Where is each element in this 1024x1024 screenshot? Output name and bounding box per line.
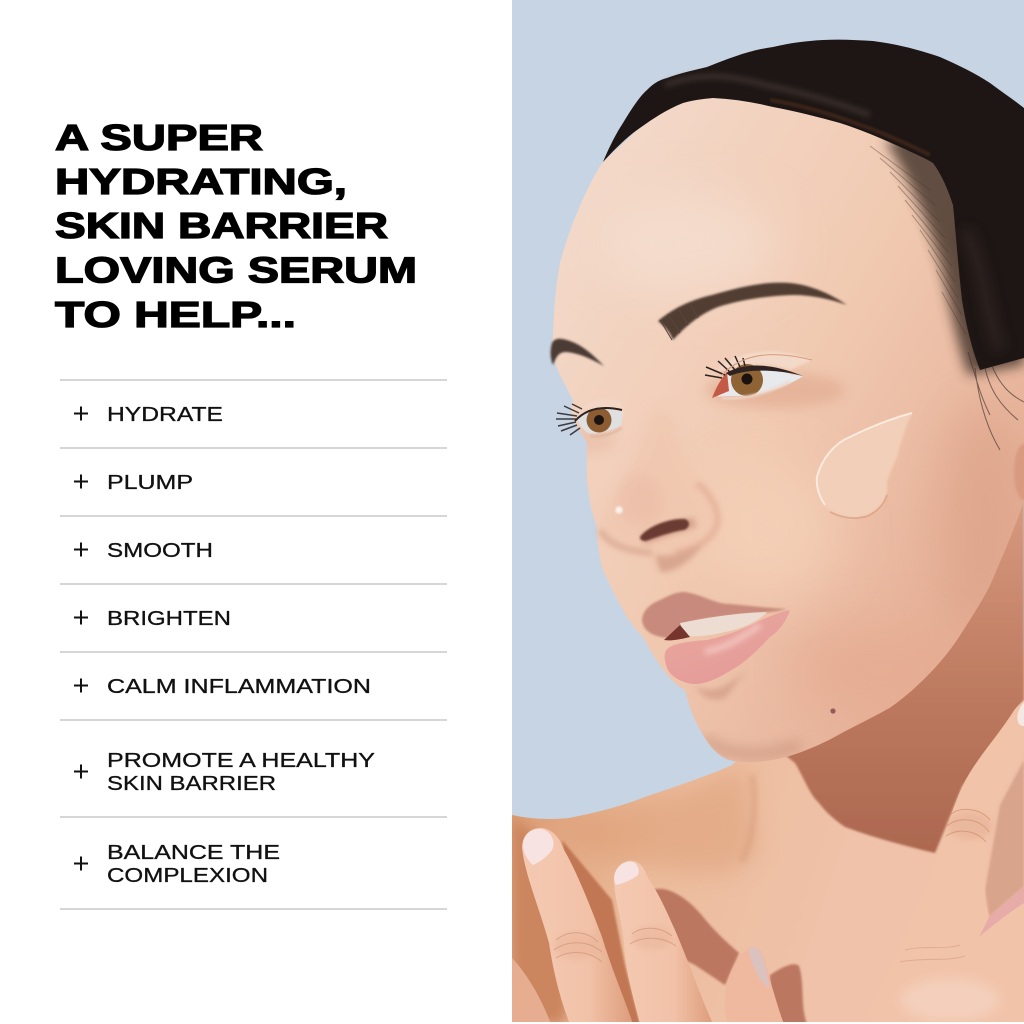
face [552,90,1024,762]
title: TO HELP... [55,294,296,335]
chest shadows cast by fingers [562,840,807,1024]
photo background [512,0,1024,819]
item: plump: PLUMP [107,472,193,494]
mole on chin [830,708,836,714]
item: promote a healthy skin barrier [74,750,375,795]
title: HYDRATING, [55,161,347,202]
item: promote a healthy skin barrier: PROMOTE A HEALTHY [107,750,375,772]
chest and shoulders [512,650,1024,1024]
feathered hairline [870,130,1024,375]
item: promote a healthy skin barrier: SKIN BARRIER [107,773,276,795]
item: hydrate [74,404,223,426]
loose hair wisps at temple [968,352,1024,450]
right eye [705,351,812,398]
photo panel: woman applying serum [512,0,1024,1024]
nose [595,469,722,574]
title: A SUPER [55,117,263,158]
finger: middle [614,861,713,1024]
finger: index [522,828,633,1024]
skin right of raised finger [985,760,1024,917]
item: balance the complexion: BALANCE THE [107,842,280,864]
lips [642,592,790,700]
item: brighten: BRIGHTEN [107,608,231,630]
left eyebrow [551,339,604,366]
right eyebrow [658,283,847,340]
finger: lower left edge [512,958,551,1024]
item: balance the complexion [74,842,280,887]
item: smooth [74,540,213,562]
item: smooth: SMOOTH [107,540,213,562]
right hand [900,700,1024,1022]
item: hydrate: HYDRATE [107,404,223,426]
serum patch on cheek [817,413,912,518]
item: balance the complexion: COMPLEXION [107,865,268,887]
title: LOVING SERUM [55,250,417,290]
title [55,117,417,335]
neck shadow [785,480,1024,853]
item: calm inflammation: CALM INFLAMMATION [107,676,371,698]
title: SKIN BARRIER [55,205,388,246]
ear [1014,444,1024,500]
hair [603,40,1024,370]
item: plump [74,472,193,494]
left eye [556,403,622,438]
benefits list [60,380,447,909]
item: brighten [74,608,231,630]
left hand fingers [512,828,784,1024]
finger: small curled [725,947,784,1024]
